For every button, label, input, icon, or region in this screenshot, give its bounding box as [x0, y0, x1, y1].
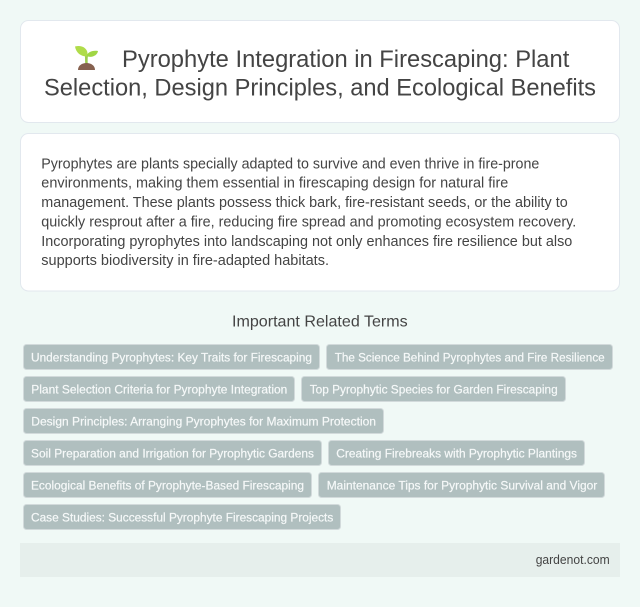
tag: creating firebreaks: [328, 440, 584, 466]
text block: description: Pyrophytes are plants specially adapted to survive and even thrive in fire-prone: [41, 156, 539, 172]
tag: science behind pyrophytes: The Science Behind Pyrophytes and Fire Resilience: [335, 350, 605, 364]
tag: maintenance tips: [318, 472, 604, 498]
text block: description: environments, making them essential in firescaping design for natural fire: [41, 176, 508, 192]
tag: maintenance tips: Maintenance Tips for Pyrophytic Survival and Vigor: [327, 478, 597, 492]
tag: creating firebreaks: Creating Firebreaks with Pyrophytic Plantings: [336, 446, 577, 460]
tag: ecological benefits: Ecological Benefits of Pyrophyte-Based Firescaping: [31, 478, 304, 492]
heading: important related terms: Important Related Terms: [232, 314, 408, 331]
tag list: related terms: [24, 344, 612, 530]
tag: science behind pyrophytes: [326, 344, 612, 370]
footer: [20, 543, 620, 577]
tag: design principles: Design Principles: Arranging Pyrophytes for Maximum Protection: [31, 414, 376, 428]
title: Selection, Design Principles, and Ecological Benefits: [44, 75, 596, 102]
footer: gardenot.com: [536, 552, 610, 567]
tag: top pyrophytic species: [302, 376, 566, 402]
tag: plant selection criteria: Plant Selection Criteria for Pyrophyte Integration: [31, 382, 287, 396]
title: [44, 46, 596, 102]
panel: description card: [20, 134, 620, 291]
tag: understanding pyrophytes: Understanding Pyrophytes: Key Traits for Firescaping: [31, 350, 312, 364]
icon: seedling: [75, 46, 98, 70]
text block: description: [41, 156, 576, 269]
title: Pyrophyte Integration in Firescaping: Plant: [122, 46, 570, 73]
tag: understanding pyrophytes: [24, 344, 320, 370]
tag: soil preparation: Soil Preparation and Irrigation for Pyrophytic Gardens: [31, 446, 314, 460]
text block: description: quickly resprout after a fire, reducing fire spread and promoting ecosystem recovery.: [41, 214, 576, 230]
tag: soil preparation: [24, 440, 322, 466]
tag: case studies: [24, 504, 340, 530]
panel: title card: [20, 20, 620, 122]
text block: description: Incorporating pyrophytes into landscaping not only enhances fire resilience but also: [41, 234, 572, 250]
tag: ecological benefits: [24, 472, 312, 498]
text block: description: supports biodiversity in fire-adapted habitats.: [41, 253, 329, 269]
tag: design principles: [24, 408, 384, 434]
tag: case studies: Case Studies: Successful Pyrophyte Firescaping Projects: [31, 510, 333, 524]
tag: top pyrophytic species: Top Pyrophytic Species for Garden Firescaping: [310, 382, 558, 396]
text block: description: management. These plants possess thick bark, fire-resistant seeds, or the ability to: [41, 195, 568, 211]
tag: plant selection criteria: [24, 376, 294, 402]
